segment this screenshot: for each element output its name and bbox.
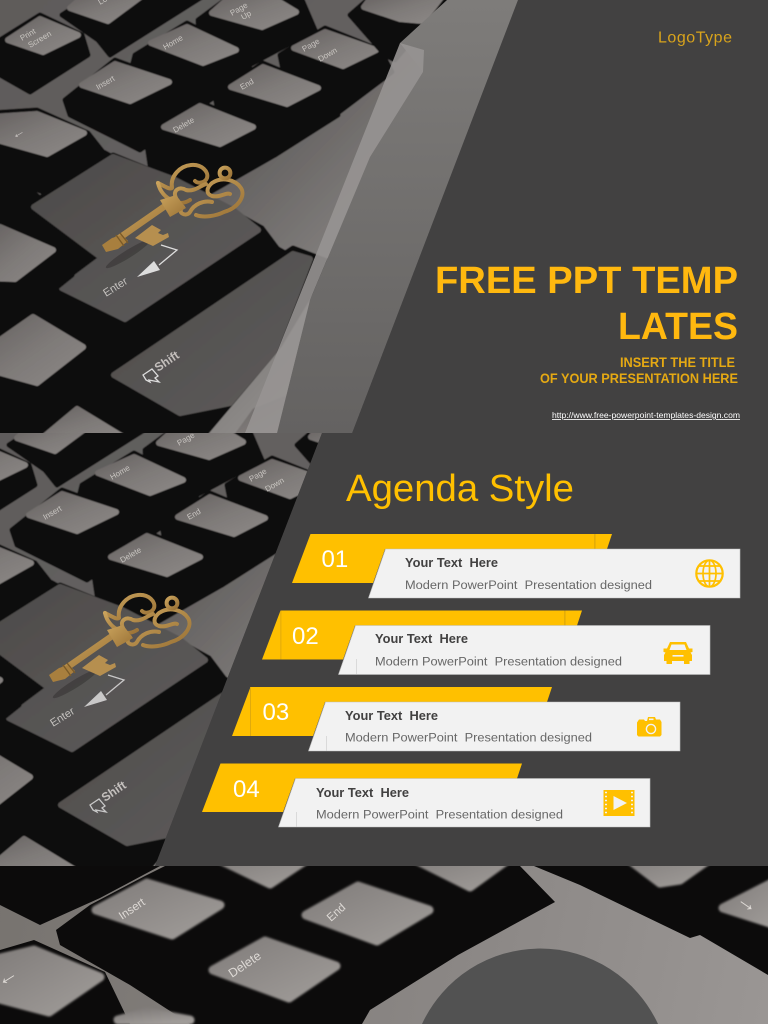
agenda row 01: Your Text Here	[405, 556, 498, 570]
circle badge	[422, 949, 658, 1024]
enlarged keyboard	[0, 858, 768, 1024]
agenda row 03: 03	[262, 699, 289, 726]
dark agenda panel	[155, 433, 768, 866]
photo: keyboard and key	[0, 433, 322, 866]
photo: keyboard with golden key: ←	[8, 122, 28, 143]
photo: keyboard and key: Shift	[99, 778, 129, 804]
title: LATES	[618, 306, 738, 348]
key legends: Delete	[226, 949, 264, 980]
agenda row 04	[202, 764, 650, 827]
icon: film play	[604, 790, 634, 816]
icon: camera	[637, 717, 662, 736]
photo: keyboard with golden key: Delete	[172, 115, 197, 135]
logotype: LogoType	[658, 30, 732, 46]
photo: keyboard with golden key: Shift	[152, 348, 182, 374]
key legends: End	[325, 902, 348, 924]
slide 1: cover	[0, 0, 768, 470]
photo: keyboard with golden key: Enter	[101, 275, 130, 300]
agenda row 01: Modern PowerPoint Presentation designed	[405, 578, 652, 592]
photo: keyboard and key: Home	[108, 463, 132, 482]
agenda row 03: Modern PowerPoint Presentation designed	[345, 730, 592, 744]
photo: keyboard with golden key: Down	[316, 46, 339, 64]
photo: keyboard and key: Delete	[118, 545, 144, 565]
agenda row 02	[262, 610, 710, 674]
agenda heading: Agenda Style	[346, 468, 574, 510]
photo: keyboard with golden key: Up	[240, 9, 253, 22]
agenda row 01	[292, 534, 740, 598]
agenda row 01: 01	[322, 546, 348, 573]
photo: keyboard and key: Down	[264, 476, 286, 494]
agenda row 02: Your Text Here	[375, 632, 468, 646]
agenda row 02: Modern PowerPoint Presentation designed	[375, 654, 622, 668]
photo: keyboard with golden key: Screen	[26, 29, 53, 50]
icon: globe	[696, 560, 723, 587]
key legends: Insert	[117, 896, 148, 922]
agenda row 04: 04	[233, 776, 260, 803]
photo: keyboard with golden key: Insert	[94, 74, 117, 92]
photo: keyboard and key: Insert	[42, 504, 64, 522]
photo: keyboard and key: End	[186, 507, 202, 522]
slide 3: cropped keyboard photo	[0, 858, 768, 1024]
subtitle: INSERT THE TITLE	[620, 355, 735, 370]
photo: keyboard and key: Enter	[48, 705, 77, 730]
photo: keyboard with golden key: Page	[300, 36, 322, 54]
subtitle: OF YOUR PRESENTATION HERE	[540, 371, 738, 386]
key legends	[0, 886, 764, 992]
icon: car	[664, 642, 692, 664]
website link: http://www.free-powerpoint-templates-design.com	[552, 410, 740, 420]
photo: keyboard and key: Page	[248, 466, 269, 484]
title: FREE PPT TEMP	[435, 260, 738, 302]
dark title panel	[352, 0, 768, 433]
photo: keyboard with golden key: Page	[228, 0, 250, 18]
slide 2: agenda	[0, 400, 768, 900]
agenda row 03	[232, 687, 680, 751]
photo: keyboard with golden key: End	[238, 77, 255, 92]
agenda row 02: 02	[292, 623, 319, 650]
agenda row 04: Modern PowerPoint Presentation designed	[316, 808, 563, 822]
key legends: →	[732, 886, 764, 919]
agenda row 03: Your Text Here	[345, 709, 438, 723]
photo: keyboard with golden key	[0, 0, 518, 433]
photo: keyboard with golden key: Home	[162, 33, 185, 52]
agenda row 04: Your Text Here	[316, 786, 409, 800]
photo: keyboard with golden key: Print	[18, 26, 38, 43]
translucent overlay bands	[245, 0, 518, 433]
photo: keyboard and key: Page	[176, 430, 197, 448]
